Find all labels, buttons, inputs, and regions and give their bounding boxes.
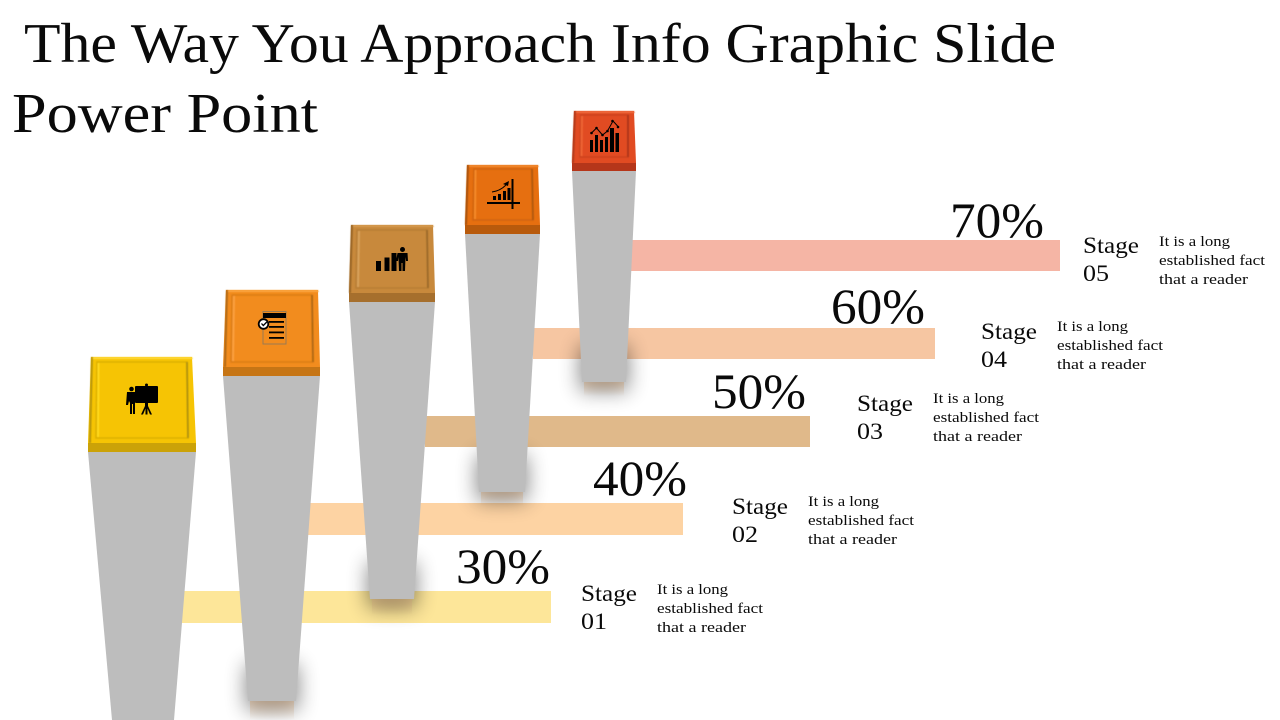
percent: 50%: 50% <box>712 363 806 419</box>
title: The Way You Approach Info Graphic Slide <box>24 13 1056 75</box>
label: stage 03 <box>857 391 1040 445</box>
icon: bars with trend line <box>590 120 619 152</box>
icon: presenter at board <box>126 384 158 414</box>
label: stage 04: that a reader <box>1057 357 1146 373</box>
label: stage 04: established fact <box>1057 338 1164 354</box>
label: stage 01: Stage <box>581 581 637 607</box>
cap: stage 02 orange <box>223 290 320 376</box>
label: stage 03: Stage <box>857 391 913 417</box>
pillar: stage 03 <box>349 302 435 599</box>
label: stage 03: It is a long <box>933 391 1005 407</box>
label: stage 02 <box>732 494 915 548</box>
icon: bars with person <box>376 247 408 271</box>
label: stage 03: 03 <box>857 419 883 445</box>
label: stage 05: that a reader <box>1159 272 1248 288</box>
label: stage 03: that a reader <box>933 429 1022 445</box>
cap: stage 03 tan <box>349 225 435 302</box>
label: stage 02: established fact <box>808 513 915 529</box>
label: stage 04: 04 <box>981 347 1007 373</box>
label: stage 02: Stage <box>732 494 788 520</box>
label: stage 01: 01 <box>581 609 607 635</box>
label: stage 04 <box>981 319 1164 373</box>
label: stage 01: It is a long <box>657 582 729 598</box>
label: stage 05 <box>1083 233 1266 288</box>
title: Power Point <box>12 83 318 145</box>
pillar shadow: stage 02 <box>246 664 298 710</box>
percent: 70%: 70% <box>950 192 1044 248</box>
reflection: stage 04 <box>481 492 523 506</box>
icon: growth chart <box>487 179 520 209</box>
cap: stage 01 yellow <box>88 357 196 452</box>
pillar: stage 04 <box>465 234 540 492</box>
label: stage 05: 05 <box>1083 261 1109 287</box>
label: stage 05: It is a long <box>1159 234 1231 250</box>
percent: 40%: 40% <box>593 450 687 506</box>
label: stage 04: Stage <box>981 319 1037 345</box>
pillar: stage 01 <box>88 452 196 720</box>
pillar shadow: stage 05 <box>580 345 628 391</box>
cap: stage 05 red <box>572 111 636 171</box>
label: stage 01: that a reader <box>657 620 746 636</box>
label: stage 01 <box>581 581 764 636</box>
label: stage 02: 02 <box>732 522 758 548</box>
pillar shadow: stage 04 <box>477 455 527 501</box>
label: stage 02: It is a long <box>808 494 880 510</box>
cap: stage 04 dark orange <box>465 165 540 234</box>
bar: stage 05 <box>631 240 1060 271</box>
label: stage 02: that a reader <box>808 532 897 548</box>
label: stage 04: It is a long <box>1057 319 1129 335</box>
bar: stage 04 <box>533 328 935 359</box>
label: stage 03: established fact <box>933 410 1040 426</box>
bar: stage 03 <box>425 416 810 447</box>
pillar: stage 02 <box>223 376 320 701</box>
reflection: stage 05 <box>584 382 624 396</box>
pillar shadow: stage 03 <box>368 562 416 608</box>
reflection: stage 03 <box>372 599 412 615</box>
reflection: stage 02 <box>250 701 294 720</box>
bar: stage 02 <box>307 503 683 535</box>
label: stage 05: Stage <box>1083 233 1139 259</box>
label: stage 05: established fact <box>1159 253 1266 269</box>
label: stage 01: established fact <box>657 601 764 617</box>
icon: checklist <box>259 312 286 344</box>
title <box>12 13 1056 145</box>
pillar: stage 05 <box>572 171 636 382</box>
percent: 30%: 30% <box>456 538 550 594</box>
percent: 60%: 60% <box>831 278 925 334</box>
bar: stage 01 <box>181 591 551 623</box>
